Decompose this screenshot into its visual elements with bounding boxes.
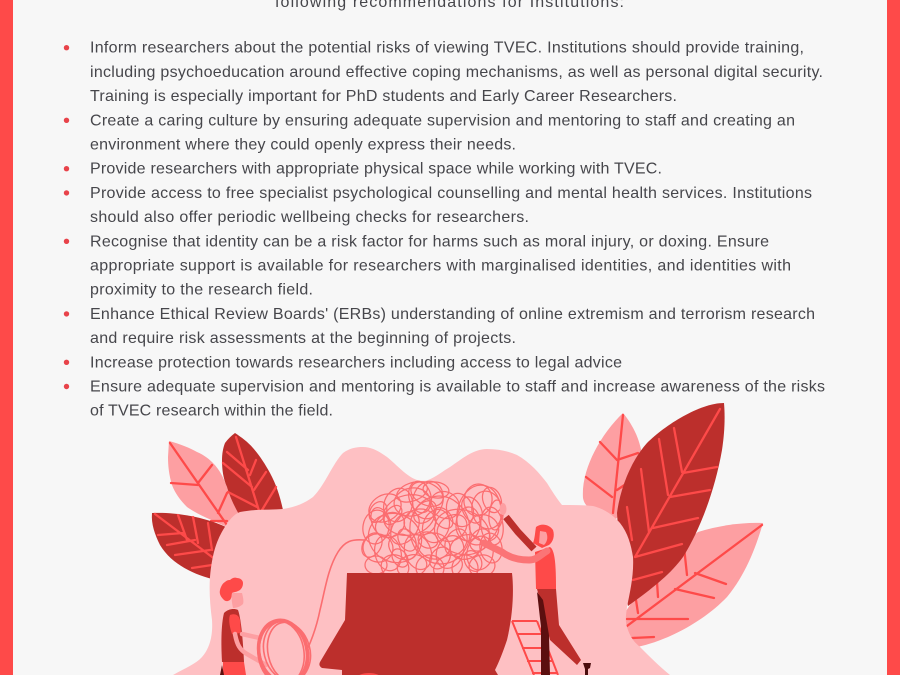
recommendation: identity: proximity to the research field. <box>90 282 313 299</box>
left red border <box>0 0 13 675</box>
pale leaf right <box>620 523 763 647</box>
rope coil <box>252 615 318 675</box>
recommendation: ethical review boards <box>64 306 815 347</box>
dark leaf lower <box>152 513 226 580</box>
woman front leg <box>537 589 581 665</box>
boy legs <box>223 662 246 675</box>
right leaves <box>583 403 763 647</box>
left leaves <box>152 433 283 580</box>
woman raised arm <box>506 517 534 549</box>
recommendation: counselling: Provide access to free specialist psychological counselling and mental health services. Institutions <box>90 185 812 202</box>
boy face <box>232 593 243 608</box>
dark leaf big right <box>617 403 725 606</box>
recommendation: counselling <box>64 185 812 226</box>
recommendation: caring culture <box>64 112 795 154</box>
recommendation: counselling: should also offer periodic wellbeing checks for researchers. <box>90 209 529 226</box>
woman lower arm <box>484 543 547 560</box>
woman back leg <box>537 592 550 675</box>
recommendation: supervision: Ensure adequate supervision and mentoring is available to staff and increase awareness of the risks <box>90 378 825 396</box>
pink background blob <box>173 447 670 675</box>
woman shoe <box>583 663 591 675</box>
recommendation: inform researchers: Inform researchers about the potential risks of viewing TVEC. Institutions should provide training, <box>90 40 804 57</box>
recommendation: inform researchers <box>64 40 823 105</box>
recommendation: identity <box>64 233 791 299</box>
boy dark leg <box>220 665 224 675</box>
recommendations list <box>64 40 825 420</box>
recommendation: identity: Recognise that identity can be a risk factor for harms such as moral injury, or doxing. Ensure <box>90 233 769 250</box>
woman face <box>539 531 547 545</box>
figure: boy with rope coil <box>220 578 318 675</box>
recommendation: physical space: Provide researchers with appropriate physical space while working with TVEC. <box>90 161 662 178</box>
woman torso <box>535 547 556 589</box>
mouth accent <box>357 673 381 675</box>
recommendation: ethical review boards: Enhance Ethical Review Boards' (ERBs) understanding of online extremism and terrorism research <box>90 306 815 323</box>
head silhouette <box>319 573 513 675</box>
dark leaf top <box>222 433 283 516</box>
recommendation: supervision <box>64 378 825 420</box>
right red border <box>887 0 900 675</box>
recommendation: inform researchers: including psychoeducation around effective coping mechanisms, as well as personal digital security. <box>90 64 823 81</box>
recommendation: supervision: of TVEC research within the field. <box>90 403 333 420</box>
cord from tangle to coil <box>307 540 364 650</box>
thought tangle scribble <box>358 477 506 584</box>
recommendation: identity: appropriate support is available for researchers with marginalised identities, and identities with <box>90 258 791 274</box>
recommendation: caring culture: Create a caring culture by ensuring adequate supervision and mentoring to staff and creating an <box>90 112 795 129</box>
ladder <box>512 621 558 675</box>
recommendation: inform researchers: Training is especially important for PhD students and Early Career Researchers. <box>90 88 677 105</box>
boy vest <box>221 609 244 662</box>
recommendation: protection: Increase protection towards researchers including access to legal advice <box>90 354 622 371</box>
pale leaf left <box>168 441 240 527</box>
boy hair <box>220 578 243 601</box>
illustration: head with tangled thoughts <box>152 403 763 675</box>
pale leaf top right <box>583 413 642 520</box>
woman raised hand <box>500 503 506 515</box>
recommendation: caring culture: environment where they could openly express their needs. <box>90 136 516 154</box>
boy sleeve <box>229 614 241 634</box>
boy arms <box>235 634 266 665</box>
woman hair <box>533 525 554 548</box>
figure: woman on ladder <box>484 503 591 675</box>
recommendation: ethical review boards: and require risk assessments at the beginning of projects. <box>90 330 516 347</box>
